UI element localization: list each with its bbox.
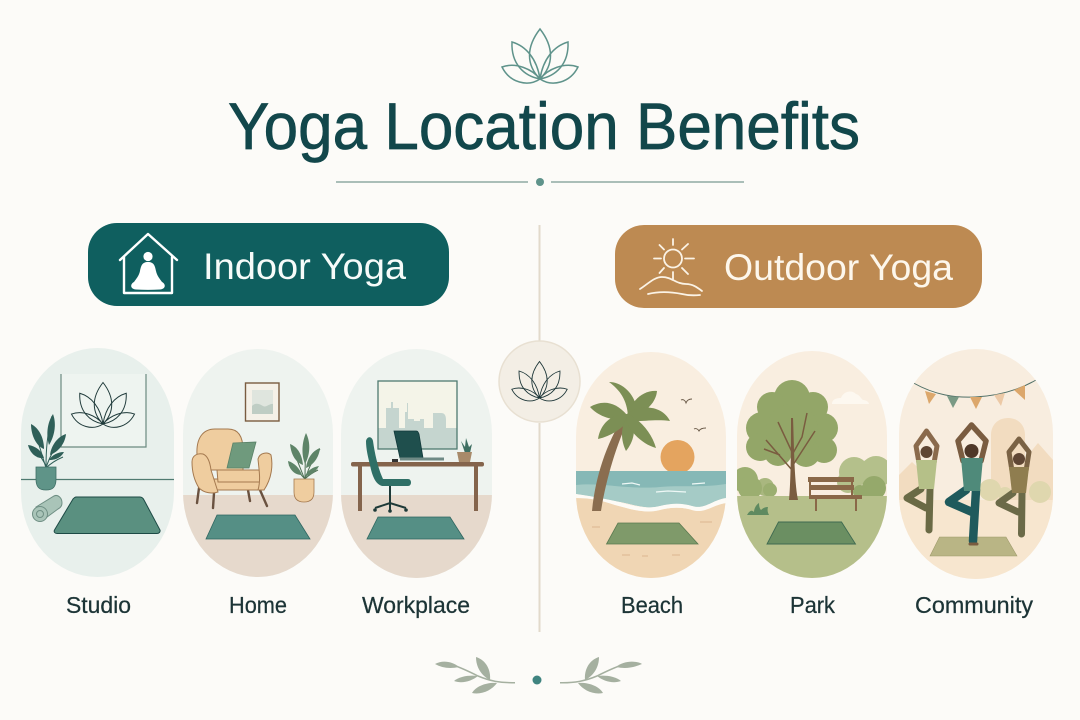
grass [737,496,887,578]
community scene [899,349,1053,579]
label: Workplace: Workplace [362,592,470,618]
bunting [914,380,1036,409]
tree [746,380,838,500]
bushes [737,456,887,496]
right sprig [560,657,642,693]
figure: right [999,439,1029,534]
laptop [392,431,444,462]
birds [681,399,706,431]
heading: Outdoor Yoga pill [615,225,982,308]
pillow [227,442,256,468]
yoga mat [206,515,310,539]
panel: Park [732,351,892,618]
heading: Indoor Yoga pill [88,223,449,306]
title: Yoga Location Benefits [228,89,860,163]
beach scene [576,352,726,578]
background buildings [899,418,1053,500]
yoga mat [367,517,464,539]
icon: top lotus [502,29,578,83]
desk plant [457,438,472,462]
figure: center [949,425,986,544]
bushes [979,479,1051,503]
cloud [832,391,869,404]
bottom ornament [435,657,642,693]
sea [576,471,726,507]
panel: Home [183,349,333,618]
yoga mat [606,523,698,544]
park scene [732,351,892,578]
label: Home: Home [229,592,287,618]
title divider [336,178,744,186]
window with skyline [378,381,457,449]
picture frame [246,383,279,421]
rolled mat [32,495,62,522]
potted plant [288,433,320,502]
bench [808,477,862,511]
yoga mat [930,537,1017,556]
sand [576,498,726,578]
left sprig [435,657,515,693]
sand marks [592,522,712,556]
yoga mat [767,522,856,544]
label: Community: Community [915,592,1033,618]
potted plant [28,414,66,490]
figure: left [907,431,937,530]
icon: sun over dunes [640,239,702,295]
panel: Workplace [341,349,492,618]
label: Beach: Beach [621,592,683,618]
panel: Community [899,349,1053,618]
icon: house with meditating figure [120,234,177,293]
panel: Studio [21,348,174,618]
heading: Outdoor Yoga pill: Outdoor Yoga [724,247,953,288]
workplace scene [341,349,492,578]
office chair [366,437,411,513]
center divider line [538,225,540,632]
label: Park: Park [790,592,835,618]
heading: Indoor Yoga pill: Indoor Yoga [203,246,406,287]
yoga mat [54,497,160,534]
wall lotus art [71,382,135,427]
home scene [183,349,333,577]
center lotus badge [499,341,580,422]
label: Studio: Studio [66,592,131,618]
palm tree [590,382,670,511]
wave highlights [622,483,705,492]
armchair [192,429,272,508]
panel: Beach [576,352,726,618]
sun [660,440,694,474]
studio scene [21,348,174,577]
small plant [747,503,769,515]
desk [351,462,484,511]
